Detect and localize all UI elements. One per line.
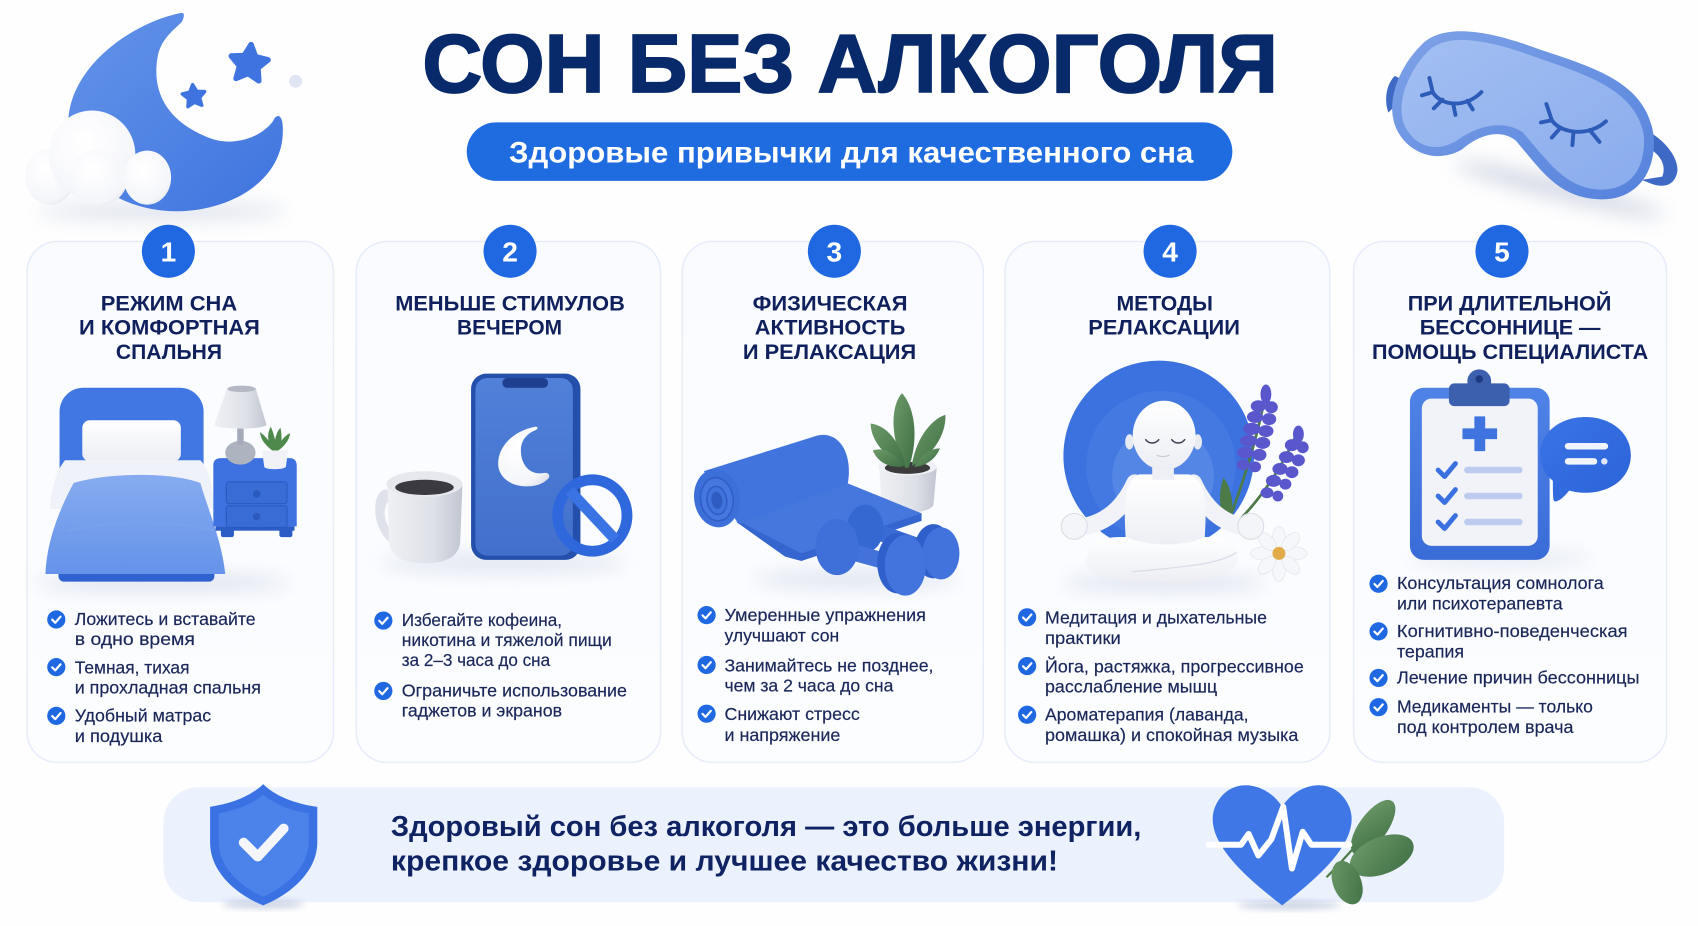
number badge 2 (484, 225, 537, 278)
illustration: meditating figure with lavender and daisy (1061, 361, 1309, 590)
heading: И РЕЛАКСАЦИЯ (743, 339, 916, 364)
footer banner (164, 784, 1504, 910)
bullet: или психотерапевта (1397, 594, 1563, 614)
bullet: и подушка (75, 726, 163, 746)
icon: sleep mask (1386, 31, 1677, 224)
illustration: bed with nightstand (35, 386, 297, 590)
bullet: Ограничьте использование (402, 680, 627, 700)
bullet (47, 658, 261, 698)
bullet (374, 680, 627, 720)
panel: физическая активность (682, 225, 983, 762)
heading (79, 290, 260, 364)
panel: режим сна и спальня (27, 225, 334, 762)
heading (1372, 290, 1649, 364)
bullet: гаджетов и экранов (402, 700, 562, 720)
bullet: Снижают стресс (724, 704, 860, 724)
bullet (698, 704, 860, 745)
bullet (47, 705, 211, 746)
bullet: Медикаменты — только (1397, 697, 1593, 717)
bullet: Темная, тихая (75, 658, 190, 678)
number badge 3 (808, 225, 861, 278)
heading: РЕЖИМ СНА (101, 290, 238, 315)
bullet (1018, 705, 1298, 745)
bullet: никотина и тяжелой пищи (402, 630, 612, 650)
number badge 4 (1144, 225, 1197, 278)
illustration: mug, phone, prohibition sign (375, 374, 628, 571)
illustration: yoga mat, dumbbells, plant (690, 393, 959, 596)
number badge 5: 5 (1494, 237, 1510, 268)
title: СОН БЕЗ АЛКОГОЛЯ (422, 18, 1278, 110)
bullet: в одно время (75, 629, 195, 649)
illustration: clipboard and speech bubble (1408, 369, 1631, 564)
number badge 1: 1 (161, 237, 176, 268)
bullet: Избегайте кофеина, (402, 610, 562, 630)
heading: ВЕЧЕРОМ (457, 315, 562, 340)
bullet: Ложитесь и вставайте (75, 609, 256, 629)
subtitle pill (467, 122, 1232, 181)
heading: МЕТОДЫ (1116, 290, 1213, 315)
bullet (1018, 656, 1304, 697)
subtitle pill: Здоровые привычки для качественного сна (509, 137, 1194, 169)
heading: АКТИВНОСТЬ (755, 315, 905, 340)
heading: И КОМФОРТНАЯ (79, 315, 260, 340)
heading (395, 290, 625, 340)
number badge 1 (142, 225, 195, 278)
bullet (1369, 573, 1604, 614)
bullet (374, 610, 612, 670)
number badge 3: 3 (827, 237, 842, 268)
footer text: крепкое здоровье и лучшее качество жизни! (391, 846, 1058, 878)
heading: ПРИ ДЛИТЕЛЬНОЙ (1408, 290, 1611, 315)
heading: ПОМОЩЬ СПЕЦИАЛИСТА (1372, 339, 1649, 364)
bullet: за 2–3 часа до сна (402, 650, 550, 670)
bullet: Йога, растяжка, прогрессивное (1045, 656, 1304, 677)
panel: методы релаксации (1005, 225, 1330, 762)
bullet: и напряжение (724, 725, 840, 745)
number badge 2: 2 (502, 237, 518, 268)
bullet: и прохладная спальня (75, 678, 261, 698)
icon: crescent moon with cloud and stars (25, 13, 302, 219)
bullet (698, 605, 926, 646)
bullet: улучшают сон (724, 626, 839, 646)
bullet: терапия (1397, 641, 1464, 661)
number badge 5 (1475, 225, 1529, 278)
bullet: чем за 2 часа до сна (724, 675, 893, 695)
bullet: Когнитивно-поведенческая (1397, 621, 1628, 641)
heading: БЕССОННИЦЕ — (1420, 315, 1601, 340)
heading: ФИЗИЧЕСКАЯ (753, 290, 907, 315)
bullet: Занимайтесь не позднее, (724, 655, 933, 675)
footer text: Здоровый сон без алкоголя — это больше энергии, (391, 811, 1141, 843)
heading (1088, 290, 1240, 340)
bullet: Консультация сомнолога (1397, 573, 1604, 593)
panel: меньше стимулов вечером (356, 225, 661, 762)
bullet: под контролем врача (1397, 717, 1574, 737)
bullet (698, 655, 933, 695)
bullet (1369, 621, 1628, 661)
heading: СПАЛЬНЯ (116, 339, 222, 364)
panel: помощь специалиста (1354, 225, 1667, 762)
bullet (1018, 607, 1267, 648)
bullet: Медитация и дыхательные (1045, 607, 1267, 627)
bullet: расслабление мышц (1045, 677, 1217, 697)
heading (743, 290, 916, 364)
bullet: Лечение причин бессонницы (1397, 667, 1640, 687)
bullet: Ароматерапия (лаванда, (1045, 705, 1249, 725)
heading: РЕЛАКСАЦИИ (1088, 315, 1240, 340)
bullet (1369, 697, 1593, 737)
footer text (391, 811, 1141, 878)
icon: heart with pulse and leaves (1209, 785, 1420, 910)
number badge 4: 4 (1162, 237, 1178, 268)
bullet (47, 609, 256, 649)
heading: МЕНЬШЕ СТИМУЛОВ (395, 290, 625, 315)
bullet: Умеренные упражнения (724, 605, 926, 625)
bullet: ромашка) и спокойная музыка (1045, 725, 1298, 745)
icon: shield with check (210, 784, 317, 909)
bullet: Удобный матрас (75, 705, 211, 725)
bullet: практики (1045, 628, 1121, 648)
